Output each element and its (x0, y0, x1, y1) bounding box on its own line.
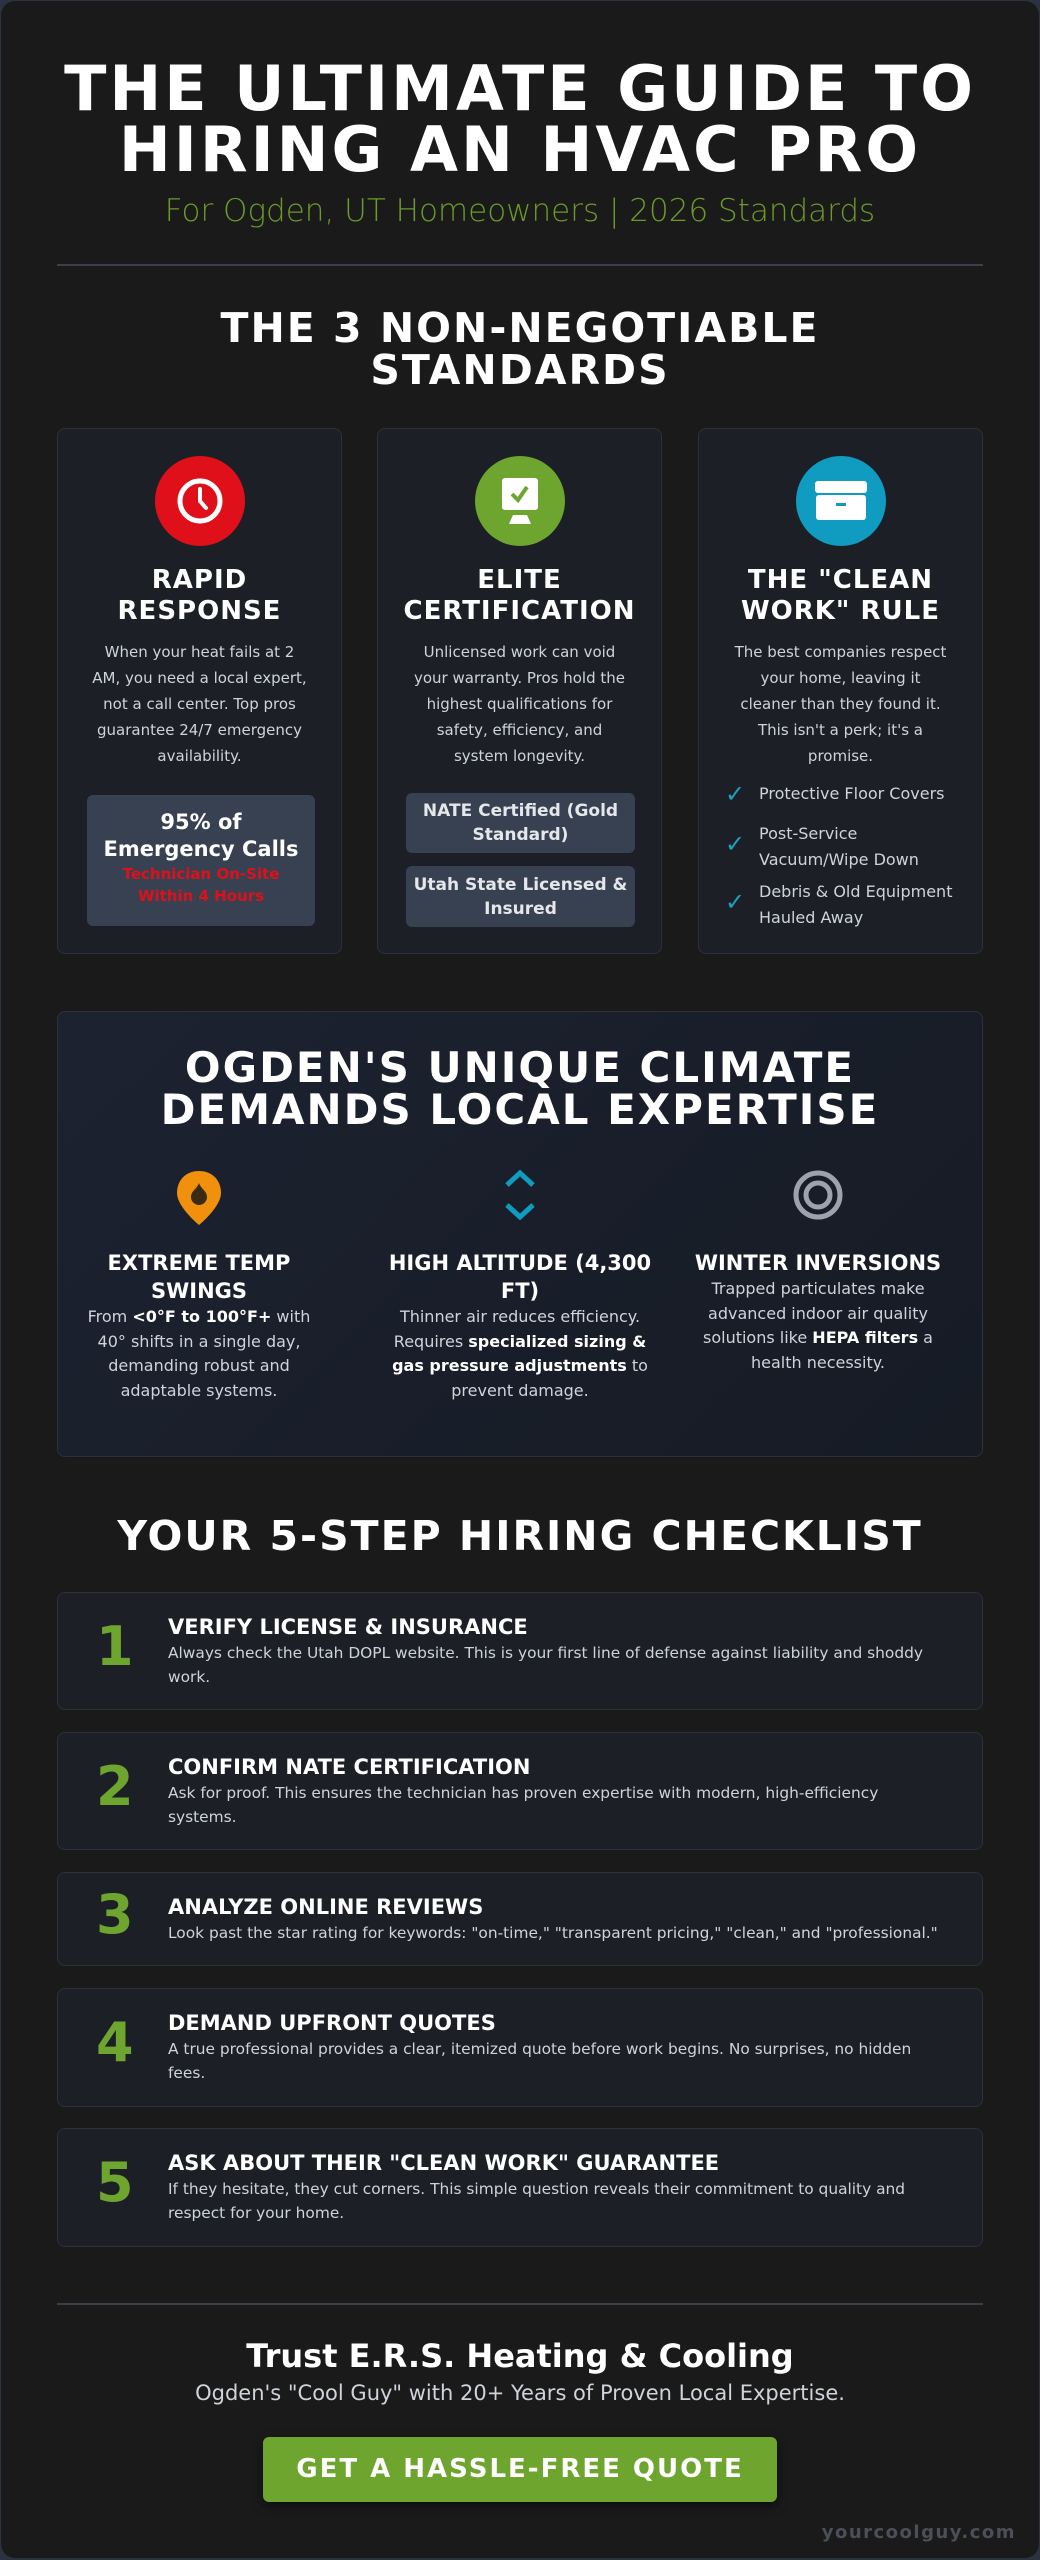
step 2: Ask for proof. This ensures the technician has proven expertise with modern, high-efficiency systems. (168, 1784, 878, 1826)
column: temp swings: EXTREME TEMP (108, 1251, 290, 1275)
CTA button: GET A HASSLE-FREE QUOTE (296, 2454, 744, 2484)
checklist: ✓ (725, 780, 745, 808)
panel: clean work: Vacuum/Wipe Down (759, 850, 919, 869)
column: inversions: Trapped particulates make advanced indoor air quality solutions like HEPA filters a health necessity. (703, 1279, 933, 1372)
icon: fire pin (177, 1171, 221, 1225)
card body: Unlicensed work can void your warranty. Pros hold the highest qualifications for safety, efficiency, and (414, 643, 625, 739)
stat box: Emergency Calls (104, 837, 298, 861)
column: altitude: FT) (501, 1279, 539, 1303)
card title (118, 565, 281, 626)
card body: cleaner than they found it. This isn't a perk; it's a promise. (740, 695, 941, 765)
panel: rapid response (57, 428, 342, 954)
step 4: 4 (96, 2011, 134, 2074)
card title (741, 565, 940, 626)
step 1: 1 (96, 1615, 134, 1678)
stat box (87, 795, 315, 926)
badge: NATE: NATE Certified (Gold Standard) (423, 801, 618, 845)
heading: 3 standards: STANDARDS (370, 346, 670, 394)
column: altitude (389, 1170, 651, 1400)
panel: clean work: Post-Service (759, 824, 857, 843)
footer url: yourcoolguy.com (822, 2522, 1016, 2543)
icon: box (796, 456, 886, 546)
title: HIRING AN HVAC PRO (119, 113, 921, 186)
panel: elite certification (377, 428, 662, 954)
step 1: VERIFY LICENSE & INSURANCE (168, 1615, 528, 1639)
step 2: 2 (96, 1755, 134, 1818)
stat box: 95% of (160, 810, 242, 834)
panel: clean work (698, 428, 983, 954)
step 2 (57, 1732, 983, 1850)
column: temp swings (88, 1171, 310, 1400)
heading: 3 standards (220, 304, 820, 394)
column: inversions (695, 1170, 941, 1372)
step 5: ASK ABOUT THEIR "CLEAN WORK" GUARANTEE (168, 2151, 719, 2175)
climate heading: DEMANDS LOCAL EXPERTISE (161, 1085, 879, 1134)
badge: NATE (406, 793, 635, 853)
title (64, 52, 976, 186)
card body: AM, you need a local expert, not a call center. Top pros guarantee 24/7 emergency availability. (92, 669, 307, 765)
panel: climate (57, 1011, 983, 1457)
panel: clean work: ✓ (725, 830, 745, 858)
heading: 3 standards: THE 3 NON-NEGOTIABLE (220, 304, 820, 352)
climate heading: OGDEN'S UNIQUE CLIMATE (185, 1043, 855, 1092)
step 3: Look past the star rating for keywords: "on-time," "transparent pricing," "clean," and "professional." (168, 1924, 938, 1942)
CTA button (263, 2437, 777, 2502)
card title: RAPID (152, 565, 247, 595)
card title: THE "CLEAN (748, 565, 933, 595)
checklist (725, 780, 944, 808)
stat box: Technician On-Site (123, 865, 279, 883)
step 4 (57, 1988, 983, 2107)
footer subtext: Ogden's "Cool Guy" with 20+ Years of Proven Local Expertise. (195, 2381, 845, 2405)
column: altitude: Thinner air reduces efficiency. Requires specialized sizing & gas pressure adjustments to prevent damage. (392, 1307, 648, 1400)
column: inversions: WINTER INVERSIONS (695, 1251, 941, 1275)
icon: arrows (505, 1170, 535, 1220)
step 4: DEMAND UPFRONT QUOTES (168, 2011, 496, 2035)
card title (404, 565, 636, 626)
icon: certificate monitor (475, 456, 565, 546)
step 3: ANALYZE ONLINE REVIEWS (168, 1895, 483, 1919)
card body: system longevity. (454, 747, 585, 765)
title: THE ULTIMATE GUIDE TO (64, 52, 976, 125)
icon: clock (155, 456, 245, 546)
card body: The best companies respect your home, leaving it (735, 643, 946, 687)
badge: Utah (406, 866, 635, 927)
card body: When your heat fails at 2 (105, 643, 294, 661)
step 4: A true professional provides a clear, itemized quote before work begins. No surprises, no hidden fees. (168, 2040, 911, 2082)
step 1 (57, 1592, 983, 1710)
subtitle: For Ogden, UT Homeowners | 2026 Standards (165, 193, 875, 229)
card title: CERTIFICATION (404, 596, 636, 626)
card body (734, 643, 946, 765)
step 2: CONFIRM NATE CERTIFICATION (168, 1755, 530, 1779)
step 5 (57, 2128, 983, 2247)
card title: RESPONSE (118, 596, 281, 626)
footer heading: Trust E.R.S. Heating & Cooling (246, 2337, 794, 2375)
panel: clean work: Debris & Old Equipment (759, 882, 952, 901)
card title: ELITE (477, 565, 562, 595)
column: temp swings: SWINGS (151, 1279, 247, 1303)
panel: clean work: Hauled Away (759, 908, 863, 927)
step 3: 3 (96, 1883, 134, 1946)
column: altitude: HIGH ALTITUDE (4,300 (389, 1251, 651, 1275)
stat box: Within 4 Hours (138, 887, 264, 905)
heading: checklist: YOUR 5-STEP HIRING CHECKLIST (117, 1512, 923, 1560)
badge: Utah: Utah State Licensed & Insured (414, 875, 627, 919)
column: temp swings: From <0°F to 100°F+ with 40° shifts in a single day, demanding robust and adaptable systems. (88, 1307, 310, 1400)
climate heading (161, 1043, 879, 1134)
card title: WORK" RULE (741, 596, 940, 626)
icon: rings (794, 1170, 842, 1220)
step 5: If they hesitate, they cut corners. This simple question reveals their commitment to quality and respect for your home. (168, 2180, 905, 2222)
step 1: Always check the Utah DOPL website. This is your first line of defense against liability and shoddy work. (168, 1644, 923, 1686)
panel: clean work: ✓ (725, 888, 745, 916)
checklist: Protective Floor Covers (759, 784, 944, 803)
step 3 (57, 1872, 983, 1966)
step 5: 5 (96, 2151, 134, 2214)
